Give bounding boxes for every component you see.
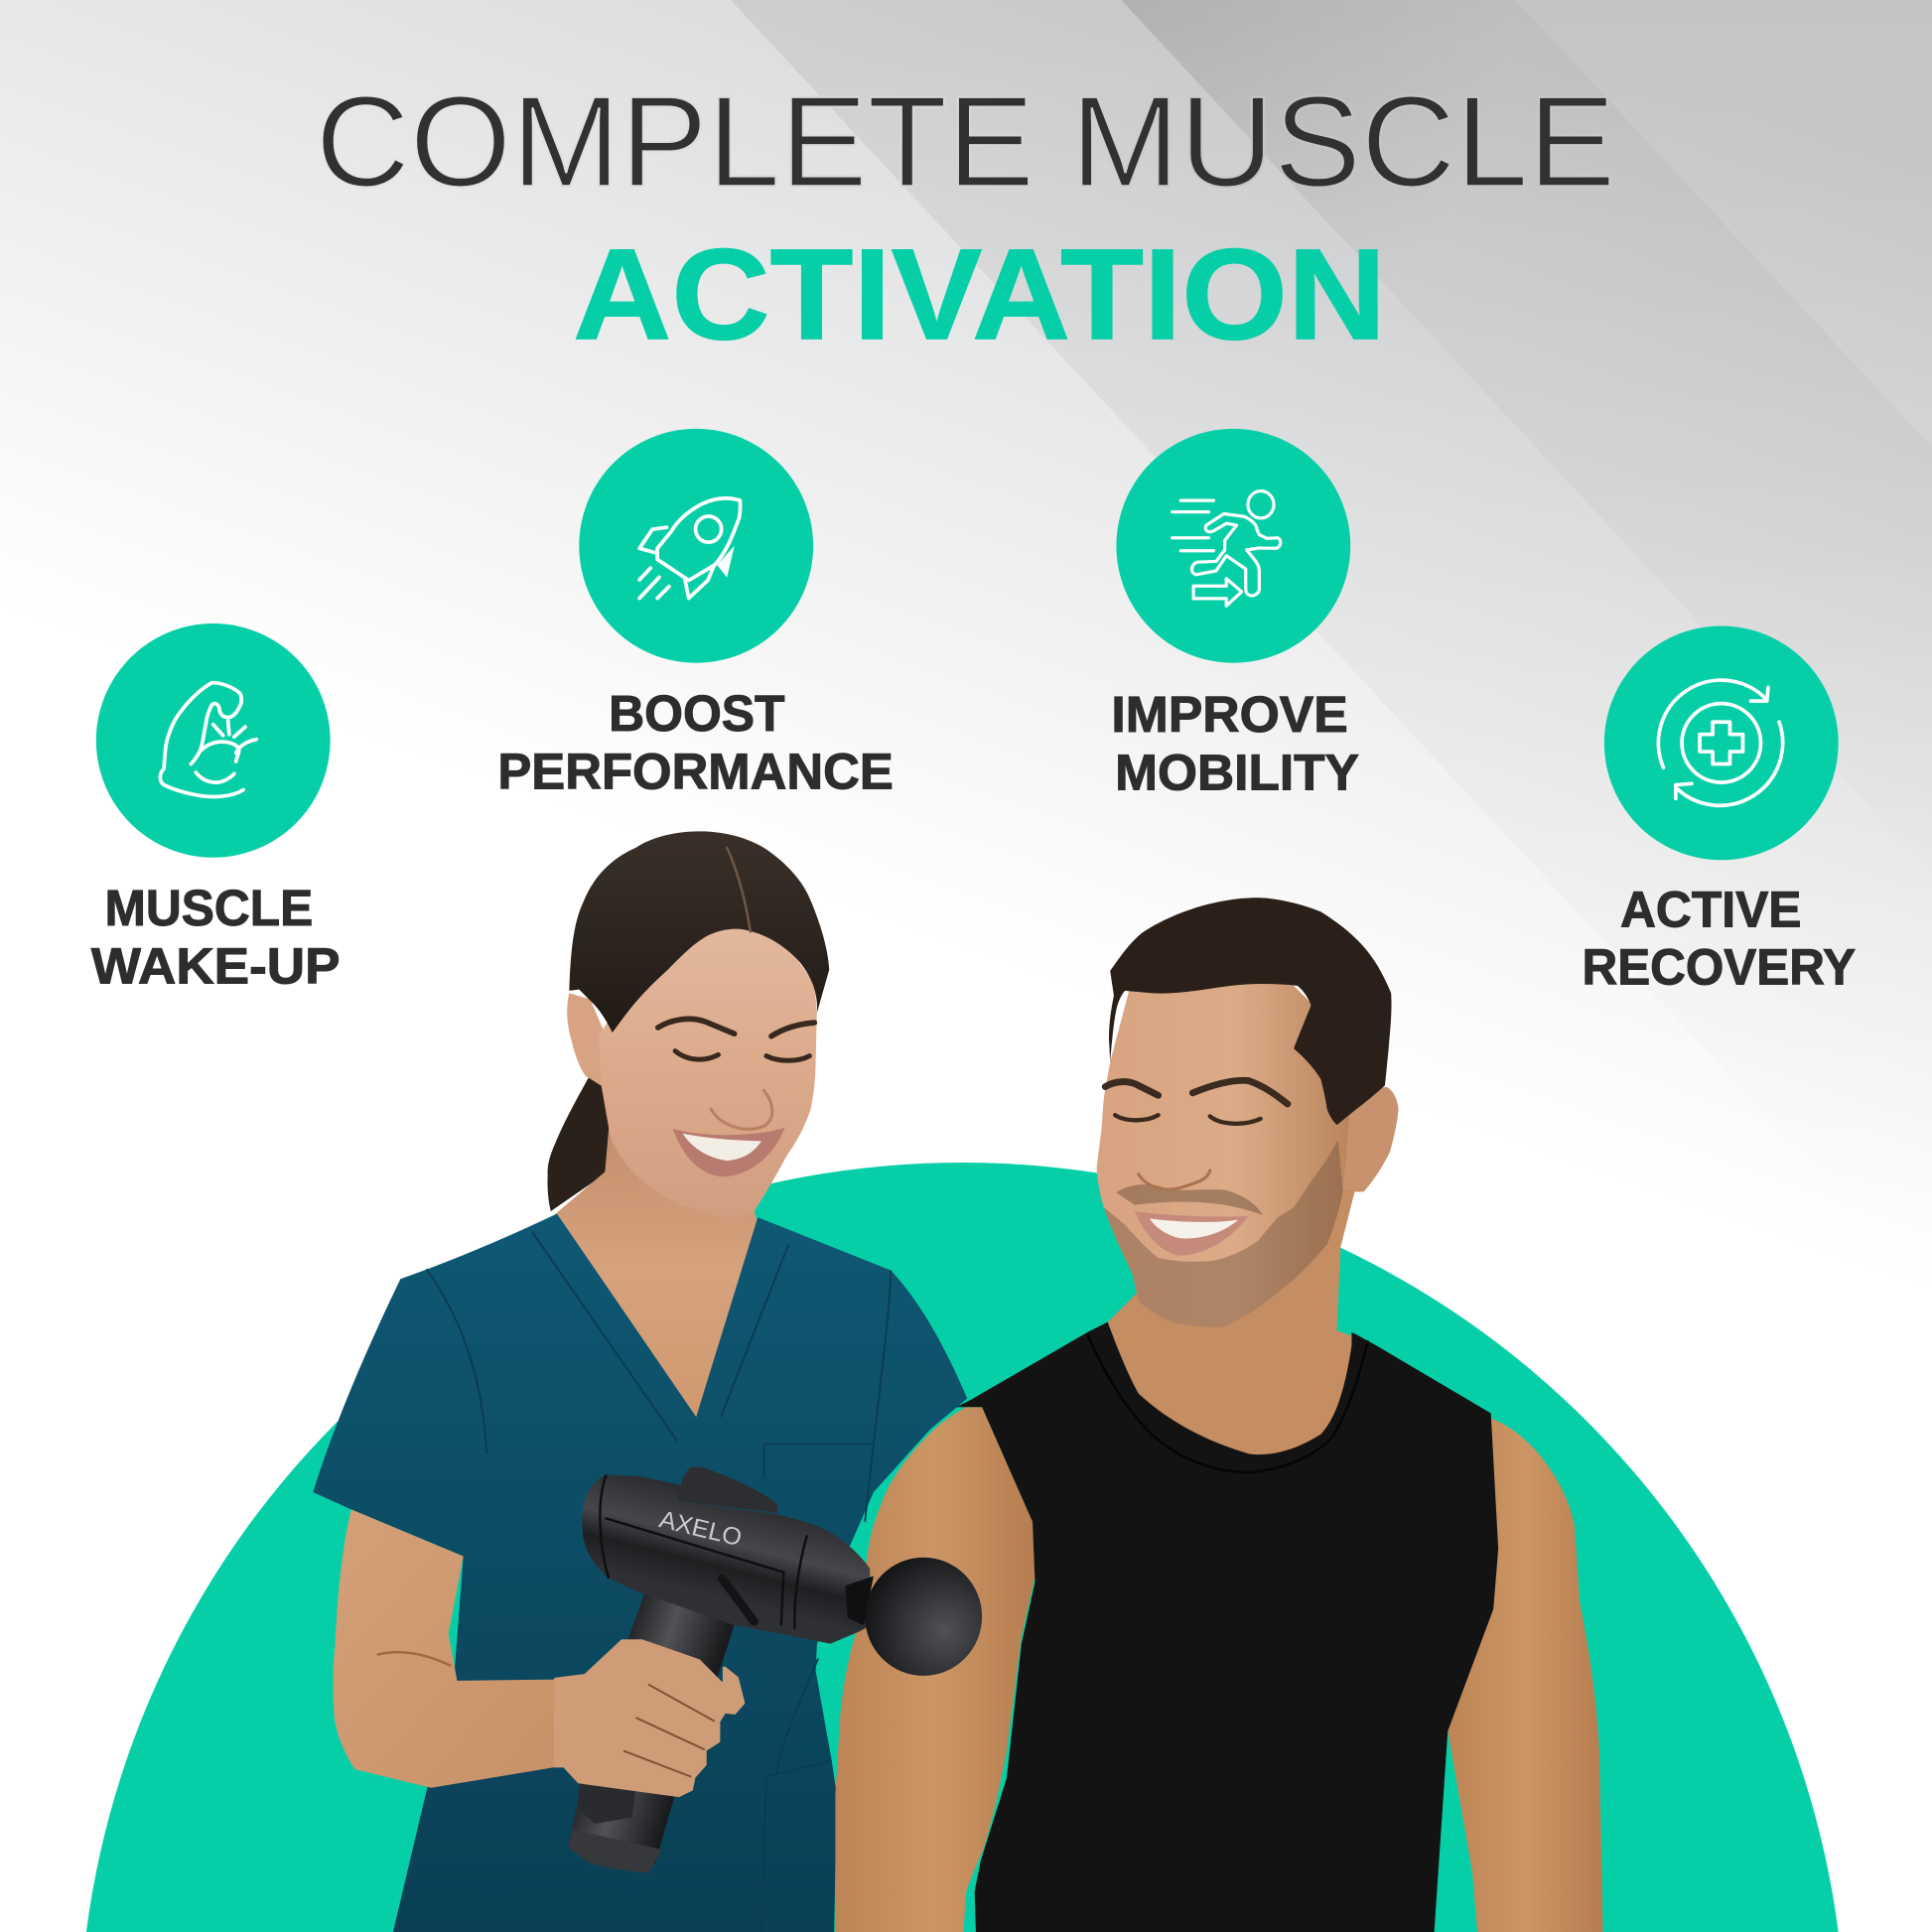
stubble bbox=[1104, 1140, 1343, 1327]
man in black tank top bbox=[835, 897, 1603, 1932]
massage ball bbox=[865, 1558, 982, 1676]
gun brand: AXELO bbox=[656, 1506, 745, 1552]
nose shade bbox=[1139, 1171, 1210, 1189]
label: active recovery: ACTIVE bbox=[1620, 881, 1801, 937]
right arm bbox=[1448, 1418, 1603, 1932]
green semicircle backdrop bbox=[86, 1163, 1839, 1932]
nose shade bbox=[711, 1090, 772, 1129]
face bbox=[1097, 961, 1350, 1327]
ear bbox=[1343, 1087, 1399, 1192]
gun trigger knob bbox=[676, 1467, 777, 1513]
scrub seams bbox=[426, 1232, 891, 1932]
smile bbox=[673, 1128, 785, 1176]
eyebrows and eyes bbox=[658, 1019, 814, 1060]
left arm bbox=[334, 1509, 564, 1788]
ear bbox=[567, 993, 609, 1090]
massage gun bbox=[556, 1467, 982, 1872]
woman in scrubs bbox=[313, 831, 967, 1932]
hair bbox=[1109, 897, 1392, 1125]
label: boost performance bbox=[497, 685, 894, 799]
gun grille bbox=[578, 1782, 635, 1824]
icon: flexed arm bbox=[96, 623, 331, 858]
icon: recovery cross with arrows bbox=[1604, 625, 1839, 860]
gun ridge and rings bbox=[600, 1475, 807, 1629]
finger lines bbox=[623, 1685, 715, 1777]
title line: complete muscle: COMPLETE MUSCLE bbox=[316, 69, 1615, 213]
tank top neck trim bbox=[1087, 1333, 1368, 1472]
hair parting bbox=[727, 848, 751, 931]
smile bbox=[1135, 1211, 1248, 1256]
title line: activation: ACTIVATION bbox=[573, 221, 1386, 366]
label: boost performance: PERFORMANCE bbox=[497, 743, 894, 799]
gun neck bbox=[845, 1576, 874, 1625]
upper left arm bbox=[835, 1407, 1035, 1932]
gun handle bbox=[568, 1563, 735, 1863]
icon: running figure bbox=[1116, 429, 1350, 663]
neck bbox=[1103, 1182, 1355, 1472]
benefit: active recovery bbox=[1583, 625, 1856, 996]
label: muscle wake-up bbox=[91, 880, 341, 994]
neck bbox=[556, 1115, 776, 1420]
elbow crease bbox=[377, 1652, 451, 1666]
label: improve mobility: IMPROVE bbox=[1111, 686, 1348, 743]
label: active recovery bbox=[1583, 881, 1856, 996]
eyebrows and eyes bbox=[1105, 1080, 1288, 1124]
ponytail bbox=[547, 1077, 612, 1211]
gun body bbox=[582, 1475, 871, 1644]
hair bbox=[569, 831, 829, 1033]
tank top bbox=[956, 1322, 1498, 1932]
hand over handle bbox=[556, 1641, 743, 1795]
label: muscle wake-up: WAKE-UP bbox=[91, 937, 341, 994]
scrub top bbox=[313, 1213, 967, 1932]
face bbox=[599, 924, 817, 1217]
label: improve mobility bbox=[1111, 686, 1359, 801]
benefit: boost performance bbox=[497, 429, 894, 799]
gun side slot bbox=[722, 1579, 755, 1621]
benefit: muscle wake-up bbox=[91, 623, 341, 994]
title bbox=[316, 69, 1615, 366]
label: muscle wake-up: MUSCLE bbox=[104, 880, 313, 936]
label: improve mobility: MOBILITY bbox=[1115, 745, 1359, 801]
label: active recovery: RECOVERY bbox=[1583, 939, 1856, 996]
gun battery base bbox=[568, 1830, 661, 1872]
label: boost performance: BOOST bbox=[609, 685, 785, 742]
icon: rocket bbox=[579, 429, 813, 663]
benefit: improve mobility bbox=[1111, 429, 1359, 801]
moustache bbox=[1116, 1184, 1263, 1215]
